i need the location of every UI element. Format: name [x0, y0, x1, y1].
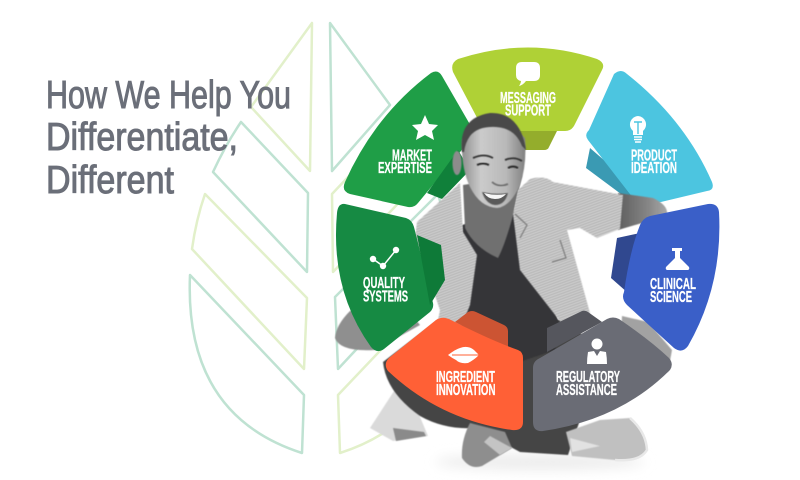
shirt right panel [513, 178, 623, 325]
brows and eyes [473, 156, 522, 161]
segment: market expertise: MARKET [392, 148, 432, 164]
smile [482, 192, 508, 205]
segment: clinical science [611, 204, 719, 351]
segment: regulatory assistance [533, 311, 672, 431]
segment: market expertise [344, 72, 472, 207]
person [335, 113, 672, 470]
neck [463, 175, 522, 258]
title [46, 74, 291, 202]
shirt fold shadow [515, 214, 566, 262]
segment: messaging support [452, 48, 603, 150]
segment: quality systems: QUALITY [363, 275, 405, 292]
segment: messaging support: SUPPORT [505, 102, 551, 120]
hanging shirt tail [370, 388, 428, 441]
segment: clinical science: SCIENCE [650, 289, 692, 306]
segment: market expertise: EXPERTISE [378, 160, 432, 177]
segment: ingredient innovation [386, 311, 523, 430]
floor shadow [435, 454, 645, 470]
segment: quality systems: SYSTEMS [363, 288, 408, 306]
title: How We Help You [46, 74, 291, 117]
segment: product ideation: PRODUCT [631, 148, 677, 164]
right knee [620, 316, 672, 372]
segment: product ideation: IDEATION [631, 160, 677, 177]
left arm [335, 300, 420, 350]
hair [462, 113, 526, 152]
black tank [462, 210, 560, 372]
title: Differentiate, [46, 116, 238, 159]
nose [492, 182, 508, 186]
segment: quality systems [336, 204, 445, 351]
face [462, 123, 525, 208]
jeans [383, 318, 640, 455]
left shoe [462, 423, 512, 467]
right shoe [566, 418, 647, 460]
title: Different [46, 159, 174, 202]
leaf outline background [190, 23, 452, 453]
segment: regulatory assistance: ASSISTANCE [556, 382, 617, 399]
segment: regulatory assistance: REGULATORY [556, 369, 620, 386]
ear [452, 151, 462, 175]
right arm [618, 193, 667, 230]
segment: product ideation [586, 71, 713, 207]
teeth [484, 193, 506, 199]
segment: messaging support: MESSAGING [500, 90, 556, 107]
segment: ingredient innovation: INGREDIENT [436, 369, 495, 386]
segment: clinical science: CLINICAL [650, 276, 696, 293]
segment: ingredient innovation: INNOVATION [436, 382, 496, 399]
shirt left panel [415, 183, 477, 350]
